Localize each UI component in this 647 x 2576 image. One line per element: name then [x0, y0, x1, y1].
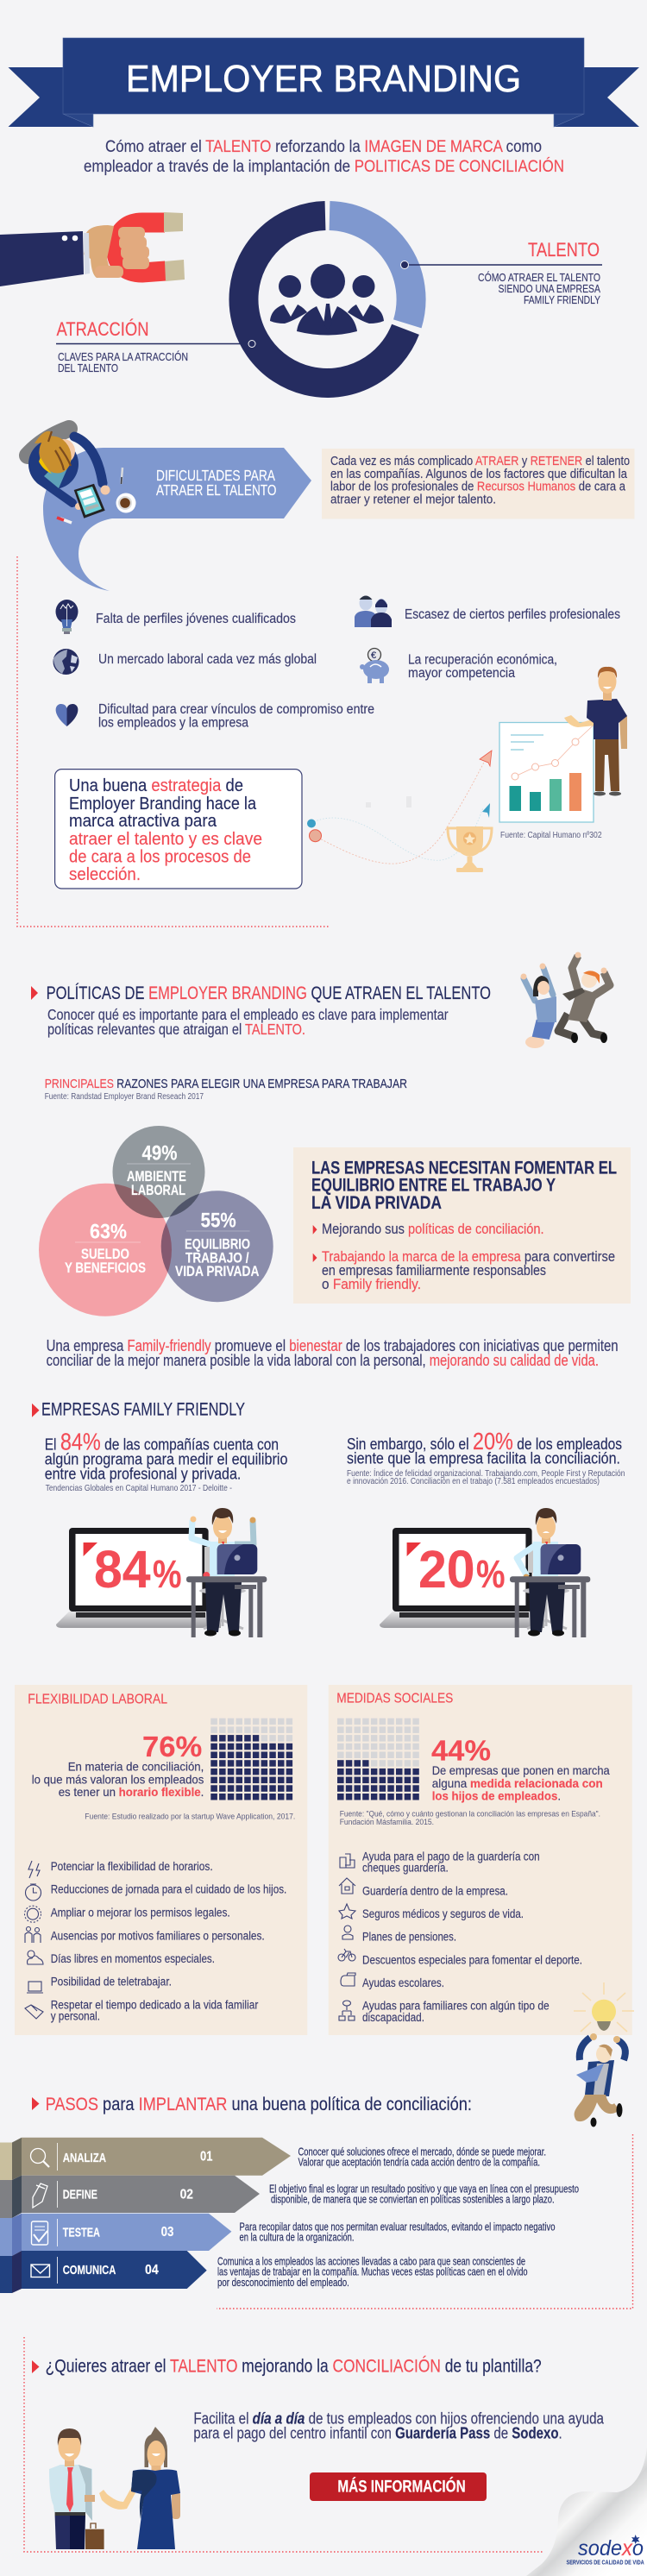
icon: globe: [53, 649, 79, 675]
chart: venn reasons: AMBIENTE: [127, 1168, 186, 1184]
list: difficulties: La recuperación económica,: [408, 652, 557, 668]
chart: venn reasons: 49%: [141, 1142, 178, 1165]
title: EMPLOYER BRANDING: [126, 58, 521, 100]
panel: work-life balance: Trabajando la marca de la empresa para convertirse: [322, 1248, 615, 1265]
icon: trophy: [448, 826, 492, 872]
icon: piggy bank with euro: [360, 649, 389, 683]
label: talento: [400, 239, 602, 306]
chart: venn reasons: Y BENEFICIOS: [65, 1260, 146, 1276]
icon: heart: [56, 704, 78, 726]
donut chart: [243, 216, 411, 383]
chart: venn reasons: TRABAJO /: [185, 1250, 249, 1266]
text: 84 percent statement: Tendencias Globales en Capital Humano 2017 - Deloitte -: [46, 1483, 232, 1493]
panel: difficulties intro: atraer y retener el mejor talento.: [330, 493, 496, 507]
chart: venn reasons: LABORAL: [131, 1182, 185, 1198]
subtitle: Cómo atraer el TALENTO reforzando la IMAGEN DE MARCA como: [105, 138, 542, 156]
text: 20 percent statement: e innovación 2016. Conciliación en el trabajo (7.581 empleados encuestados): [347, 1477, 600, 1486]
panel: work-life balance: LA VIDA PRIVADA: [311, 1193, 442, 1213]
panel: work-life balance: o Family friendly.: [322, 1276, 421, 1292]
text: step descriptions: por desconocimiento del empleado.: [217, 2276, 349, 2289]
text: 20 percent statement: [347, 1428, 625, 1486]
text: step descriptions: [217, 2146, 579, 2289]
label: atraccion: [56, 318, 255, 374]
step 1: analiza: 01: [200, 2149, 212, 2164]
panel: work-life balance: [293, 1147, 631, 1304]
list: social measures: Guardería dentro de la empresa.: [362, 1884, 508, 1897]
section heading: call to action question: ¿Quieres atraer el TALENTO mejorando la CONCILIACIÓN de tu plantilla?: [46, 2356, 542, 2376]
list: flexibility measures: Respetar el tiempo dedicado a la vida familiar: [51, 1998, 259, 2011]
list: social measures: Ayudas para familiares con algún tipo de: [362, 2000, 550, 2013]
text: step descriptions: las ventajas de trabajar en la compañía. Muchas veces estas políticas caen en el olvido: [217, 2265, 528, 2278]
text: chart source: Fuente: Capital Humano nº302: [500, 831, 602, 840]
panel: flexibilidad laboral: FLEXIBILIDAD LABORAL: [28, 1692, 167, 1706]
step 4: comunica: [0, 2251, 207, 2293]
step 1: analiza: [0, 2138, 291, 2180]
panel: flexibilidad laboral: Fuente: Estudio realizado por la startup Wave Application, 2017.: [85, 1812, 295, 1821]
chart: 76 of 100 waffle: [210, 1718, 292, 1800]
callout: employer branding strategy: de cara a los procesos de: [69, 847, 251, 866]
list: flexibility measures: y personal.: [51, 2010, 100, 2023]
text: family-friendly paragraph: conciliar de la mejor manera posible la vida laboral con la personal, mejorando su calidad de vida.: [47, 1352, 599, 1369]
chart: venn reasons: 55%: [200, 1209, 236, 1233]
callout: employer branding strategy: [55, 770, 302, 889]
section heading: politicas: POLÍTICAS DE EMPLOYER BRANDING QUE ATRAEN EL TALENTO: [47, 983, 491, 1003]
icon: man presenting chart: [564, 667, 627, 795]
panel: dificultades arrow: ATRAER EL TALENTO: [156, 481, 276, 499]
panel: medidas sociales: Fundación Másfamilia. 2015.: [340, 1818, 434, 1827]
list: flexibility measures: Potenciar la flexibilidad de horarios.: [51, 1860, 213, 1873]
icon: dotted growth paths: [307, 751, 492, 864]
section heading: politicas: políticas relevantes que atraigan el TALENTO.: [47, 1021, 305, 1038]
list: flexibility measures: Ampliar o mejorar los permisos legales.: [51, 1907, 230, 1919]
illustration: laptop 20 percent with worried man: [380, 1508, 590, 1637]
label: talento: FAMILY FRIENDLY: [524, 293, 600, 306]
panel: flexibilidad laboral: En materia de conciliación,: [68, 1759, 204, 1773]
list: social measures: Planes de pensiones.: [362, 1931, 456, 1944]
icon: two professionals: [355, 595, 392, 627]
page curl: [526, 2446, 647, 2576]
label: talento: TALENTO: [528, 239, 600, 261]
icon: piggy bank with euro: €: [371, 650, 376, 661]
section heading: empresas family friendly: EMPRESAS FAMILY FRIENDLY: [41, 1400, 245, 1420]
panel: difficulties intro: Cada vez es más complicado ATRAER y RETENER el talento: [330, 454, 630, 468]
list: flexibility measures: Posibilidad de teletrabajar.: [51, 1976, 172, 1989]
text: family-friendly paragraph: [47, 1337, 619, 1369]
label: atraccion: CLAVES PARA LA ATRACCIÓN: [58, 350, 188, 363]
list: flexibility measures: Reducciones de jornada para el cuidado de los hijos.: [51, 1883, 286, 1896]
panel: flexibilidad laboral: 76%: [142, 1731, 202, 1762]
panel: medidas sociales: 44%: [431, 1735, 491, 1767]
callout: employer branding strategy: selección.: [69, 865, 141, 884]
icon: jumping man: [575, 2033, 625, 2127]
chart: venn reasons: EQUILIBRIO: [185, 1236, 250, 1253]
text: step descriptions: Valorar que aceptación tendría cada acción dentro de la compañía.: [298, 2156, 540, 2169]
text: guarderia pass offer: [193, 2410, 605, 2442]
illustration: businessman: [49, 2428, 104, 2549]
heading: principales razones: Fuente: Randstad Employer Brand Reseach 2017: [45, 1092, 204, 1102]
step 3: testea: TESTEA: [63, 2226, 100, 2240]
panel: flexibilidad laboral: [15, 1685, 307, 2035]
chart: venn reasons: 63%: [90, 1221, 127, 1244]
panel: difficulties intro: labor de los profesionales de Recursos Humanos de cara a: [330, 480, 626, 494]
step 4: comunica: COMUNICA: [63, 2263, 116, 2278]
panel: flexibilidad laboral: es tener un horario flexible.: [59, 1785, 204, 1799]
text: 84 percent statement: entre vida profesional y privada.: [45, 1465, 241, 1483]
sodexo logo: [566, 2535, 644, 2567]
icon: hand holding magnet: [0, 212, 185, 286]
callout: employer branding strategy: atraer el talento y es clave: [69, 830, 262, 849]
step 1: analiza: ANALIZA: [63, 2151, 106, 2165]
illustration: laptop 20 percent with worried man: %: [476, 1552, 506, 1596]
illustration: laptop 84 percent with happy man: [56, 1508, 267, 1637]
list: difficulties: mayor competencia: [408, 666, 515, 681]
panel: medidas sociales: alguna medida relacionada con: [432, 1776, 603, 1790]
section heading: politicas: Conocer qué es importante para el empleado es clave para implementar: [47, 1006, 449, 1023]
heading: principales razones: PRINCIPALES RAZONES PARA ELEGIR UNA EMPRESA PARA TRABAJAR: [45, 1077, 407, 1091]
text: 20 percent statement: Sin embargo, sólo el 20% de los empleados: [347, 1428, 622, 1454]
text: step descriptions: en la cultura de la organización.: [240, 2231, 354, 2244]
list: social measures: discapacidad.: [362, 2011, 424, 2024]
icon: group of people: [270, 264, 384, 335]
panel: dificultades arrow: DIFICULTADES PARA: [156, 467, 275, 484]
step 2: define: DEFINE: [63, 2187, 97, 2202]
callout: employer branding strategy: marca atractiva para: [69, 812, 217, 831]
subtitle: empleador a través de la implantación de POLITICAS DE CONCILIACIÓN: [84, 157, 564, 176]
illustration: laptop 20 percent with worried man: 20: [418, 1540, 475, 1599]
icon: woman at desk from above: [28, 429, 136, 523]
icon: light bulb: [55, 600, 78, 634]
text: 84 percent statement: [45, 1429, 287, 1493]
text: step descriptions: Conocer qué soluciones ofrece el mercado, dónde se puede mejorar.: [298, 2146, 546, 2158]
panel: medidas sociales: los hijos de empleados.: [432, 1789, 561, 1803]
panel: work-life balance: en empresas familiarmente responsables: [322, 1262, 546, 1279]
chart: board with bars: [499, 723, 594, 822]
chart: venn reasons: VIDA PRIVADA: [175, 1263, 259, 1279]
callout: employer branding strategy: Employer Branding hace la: [69, 795, 257, 814]
icon: jumping colleagues: [521, 952, 610, 1048]
step 2: define: [0, 2176, 260, 2218]
icon: glowing bulb: [574, 1982, 634, 2032]
list: difficulties: Dificultad para crear vínculos de compromiso entre: [98, 702, 374, 717]
panel: flexibilidad laboral: lo que más valoran los empleados: [32, 1772, 204, 1786]
title banner: [9, 38, 639, 127]
panel: dificultades arrow: [43, 448, 311, 591]
icons: flexibility list: [24, 1861, 43, 2019]
list: social measures: Ayuda para el pago de la guardería con: [362, 1850, 540, 1863]
step 3: testea: 03: [161, 2225, 173, 2240]
panel: medidas sociales: Fuente: "Qué, cómo y cuánto gestionan la conciliación las empresas en España".: [340, 1810, 600, 1819]
label: atraccion: DEL TALENTO: [58, 361, 118, 374]
chart: 44 of 100 waffle: [337, 1718, 419, 1800]
list: flexibility measures: Días libres en momentos especiales.: [51, 1952, 215, 1965]
subtitle: [84, 138, 564, 176]
illustration: businesswoman: [99, 2427, 180, 2549]
list: social measures: cheques guardería.: [362, 1862, 449, 1875]
step 3: testea: [0, 2214, 231, 2256]
button: mas informacion: MÁS INFORMACIÓN: [337, 2477, 466, 2496]
label: atraccion: ATRACCIÓN: [57, 318, 148, 340]
label: talento: SIENDO UNA EMPRESA: [499, 282, 600, 295]
list: social measures: [362, 1850, 582, 2024]
list: social measures: Descuentos especiales para fomentar el deporte.: [362, 1953, 582, 1966]
steps: ribbon arrows: [0, 2138, 291, 2293]
step 2: define: 02: [180, 2187, 193, 2202]
step 4: comunica: 04: [145, 2263, 159, 2278]
illustration: laptop 84 percent with happy man: 84: [94, 1540, 151, 1599]
heading: principales razones: [45, 1077, 407, 1102]
illustration: laptop 84 percent with happy man: %: [153, 1552, 181, 1596]
section heading: pasos: PASOS para IMPLANTAR una buena política de conciliación:: [46, 2095, 472, 2114]
list: difficulties: [53, 595, 620, 731]
panel: work-life balance: EQUILIBRIO ENTRE EL TRABAJO Y: [311, 1176, 556, 1196]
list: difficulties: Escasez de ciertos perfiles profesionales: [405, 607, 620, 622]
callout: employer branding strategy: Una buena estrategia de: [69, 776, 243, 795]
list: social measures: Ayudas escolares.: [362, 1976, 444, 1989]
text: 84 percent statement: algún programa para medir el equilibrio: [45, 1450, 287, 1468]
section heading: politicas: [31, 983, 491, 1038]
text: guarderia pass offer: para el pago del centro infantil con Guardería Pass de Sodexo.: [193, 2425, 562, 2442]
text: step descriptions: Comunica a los empleados las acciones llevadas a cabo para que sean conscientes de: [217, 2255, 525, 2268]
panel: medidas sociales: De empresas que ponen en marcha: [432, 1763, 610, 1777]
list: difficulties: Un mercado laboral cada vez más global: [98, 652, 317, 667]
text: guarderia pass offer: Facilita el día a día de tus empleados con hijos ofrenciendo una ayuda: [193, 2410, 605, 2427]
list: social measures: Seguros médicos y seguros de vida.: [362, 1907, 524, 1920]
chart: venn reasons: SUELDO: [81, 1246, 129, 1262]
chart: venn reasons: [39, 1126, 273, 1316]
panel: difficulties intro: [322, 449, 635, 519]
list: difficulties: los empleados y la empresa: [98, 716, 248, 731]
text: 84 percent statement: El 84% de las compañías cuenta con: [45, 1429, 279, 1455]
list: flexibility measures: [51, 1860, 286, 2023]
panel: medidas sociales: [329, 1685, 632, 2035]
button: mas informacion: [310, 2472, 487, 2501]
label: talento: CÓMO ATRAER EL TALENTO: [478, 271, 600, 284]
list: difficulties: Falta de perfiles jóvenes cualificados: [96, 612, 296, 626]
icons: social list: [338, 1854, 355, 2020]
list: flexibility measures: Ausencias por motivos familiares o personales.: [51, 1929, 265, 1942]
panel: medidas sociales: MEDIDAS SOCIALES: [336, 1692, 453, 1706]
sodexo logo: sodexo: [578, 2536, 644, 2560]
panel: work-life balance: Mejorando sus políticas de conciliación.: [322, 1221, 544, 1237]
